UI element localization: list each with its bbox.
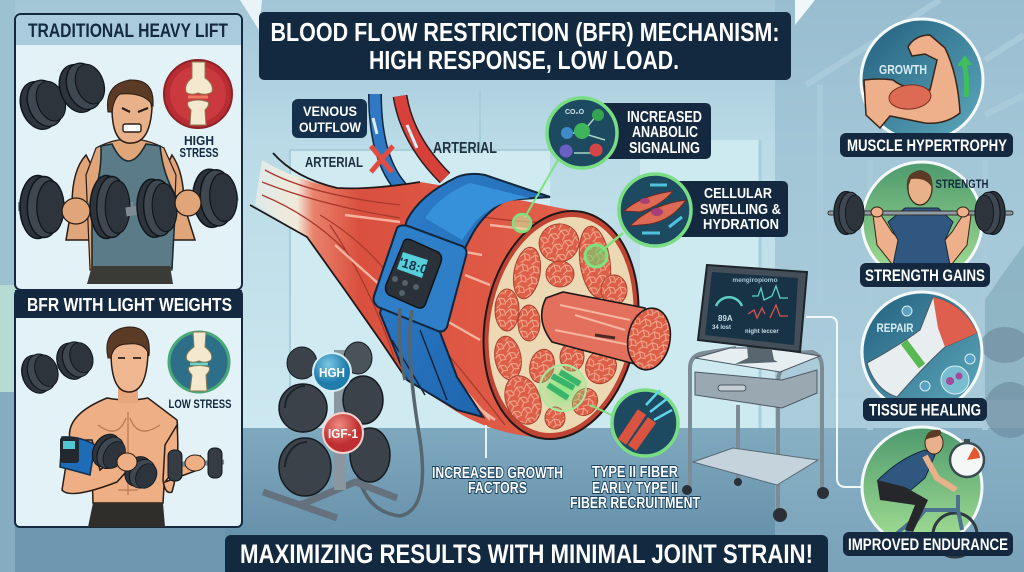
label: arterial right: ARTERIAL bbox=[433, 140, 497, 157]
callout: anabolic signaling: SIGNALING bbox=[629, 140, 700, 157]
benefit: improved endurance bbox=[843, 427, 1013, 557]
icon: blocked X bbox=[371, 146, 393, 172]
cut face of muscle bbox=[466, 199, 656, 451]
heading: traditional heavy lift: TRADITIONAL HEAVY LIFT bbox=[28, 20, 228, 42]
callout: growth factors: FACTORS bbox=[468, 480, 527, 497]
heading: BFR with light weights: BFR WITH LIGHT WEIGHTS bbox=[27, 295, 232, 315]
icon: lower left dumbbell bbox=[18, 176, 133, 238]
callout: anabolic signaling: CO₂O bbox=[565, 109, 585, 116]
callout: cellular swelling: CELLULAR bbox=[704, 185, 772, 202]
callout: type II fiber recruitment: EARLY TYPE II bbox=[592, 480, 678, 497]
icon: BFR arm cuff bbox=[60, 437, 95, 475]
label: strength gains bbox=[860, 263, 990, 287]
icon: dumbbell upper left bbox=[14, 56, 111, 135]
callout: cellular swelling: HYDRATION bbox=[703, 216, 779, 233]
BFR monitor device: '18:0 bbox=[397, 254, 429, 277]
text: low stress: LOW STRESS bbox=[168, 397, 232, 411]
monitor screen: 89A bbox=[718, 314, 733, 323]
icon: IGF-1 molecule: IGF-1 bbox=[328, 426, 358, 441]
panel: BFR with light weights bbox=[15, 290, 242, 527]
muscle illustration bbox=[250, 153, 675, 451]
connector line to benefits bbox=[806, 317, 861, 487]
BFR cuff band bbox=[380, 174, 550, 417]
text: high stress: STRESS bbox=[180, 145, 219, 160]
monitor screen: night leccer bbox=[745, 329, 779, 335]
benefit: muscle hypertrophy bbox=[840, 19, 1013, 157]
text: high stress: HIGH bbox=[184, 133, 214, 148]
panel: traditional heavy lift bbox=[14, 14, 242, 290]
icon: knee joint high stress bbox=[164, 60, 232, 128]
label: arterial left: ARTERIAL bbox=[305, 154, 363, 171]
label: venous outflow: VENOUS bbox=[303, 103, 357, 119]
callout: cellular swelling: SWELLING & bbox=[700, 201, 781, 218]
central fiber bundle bbox=[542, 292, 675, 373]
blood vessels bbox=[373, 94, 445, 204]
icon: small dumbbell bbox=[17, 336, 98, 397]
icon: knee joint low stress bbox=[169, 332, 229, 392]
label: strength gains: STRENGTH GAINS bbox=[865, 266, 985, 285]
icon: lower right dumbbell bbox=[126, 167, 239, 238]
title bbox=[259, 12, 791, 80]
monitor screen: mengiropiomo bbox=[732, 277, 778, 284]
callout: type II fiber recruitment: TYPE II FIBER bbox=[592, 464, 678, 481]
bottom banner: MAXIMIZING RESULTS WITH MINIMAL JOINT STRAIN! bbox=[240, 539, 813, 569]
callout: growth factors: INCREASED GROWTH bbox=[432, 465, 563, 482]
text: high stress bbox=[180, 133, 219, 160]
callout: anabolic signaling: INCREASED bbox=[627, 109, 702, 126]
icon: right hand dumbbell bbox=[168, 448, 224, 481]
label: venous outflow bbox=[292, 99, 367, 138]
icon: HGH molecule bbox=[313, 353, 351, 391]
benefit: tissue healing: REPAIR bbox=[876, 323, 914, 335]
callout: anabolic signaling: ANABOLIC bbox=[632, 124, 698, 141]
man with BFR cuff bbox=[62, 327, 200, 527]
icon: IGF-1 molecule bbox=[323, 413, 363, 453]
title: HIGH RESPONSE, LOW LOAD. bbox=[369, 45, 679, 75]
label: tissue healing: TISSUE HEALING bbox=[869, 400, 981, 420]
heading: BFR with light weights bbox=[15, 290, 242, 318]
icon: held dumbbell bbox=[87, 429, 162, 494]
monitor screen: 34 lost bbox=[712, 325, 731, 331]
tubing from device bbox=[353, 308, 422, 516]
bottom banner bbox=[225, 535, 828, 572]
medical cart with monitor bbox=[682, 265, 829, 522]
benefit: strength gains bbox=[828, 162, 1013, 287]
callout: cellular swelling bbox=[585, 174, 788, 267]
heading: traditional heavy lift bbox=[16, 15, 241, 45]
BFR monitor device bbox=[374, 225, 466, 332]
label: venous outflow: OUTFLOW bbox=[299, 119, 362, 135]
benefit: muscle hypertrophy: GROWTH bbox=[879, 62, 927, 77]
icon: HGH molecule: HGH bbox=[319, 365, 345, 380]
callout: growth factors bbox=[432, 425, 563, 497]
weight plate rack with hormones bbox=[263, 342, 397, 518]
callout: type II fiber recruitment: FIBER RECRUITMENT bbox=[570, 495, 700, 512]
callout: type II fiber recruitment bbox=[540, 365, 700, 512]
benefit: strength gains: STRENGTH bbox=[936, 177, 988, 191]
title: BLOOD FLOW RESTRICTION (BFR) MECHANISM: bbox=[270, 17, 780, 47]
callout: anabolic signaling bbox=[513, 98, 711, 232]
man lifting heavy dumbbells bbox=[66, 80, 195, 284]
benefit: tissue healing bbox=[862, 292, 987, 421]
monitor screen bbox=[698, 265, 807, 352]
